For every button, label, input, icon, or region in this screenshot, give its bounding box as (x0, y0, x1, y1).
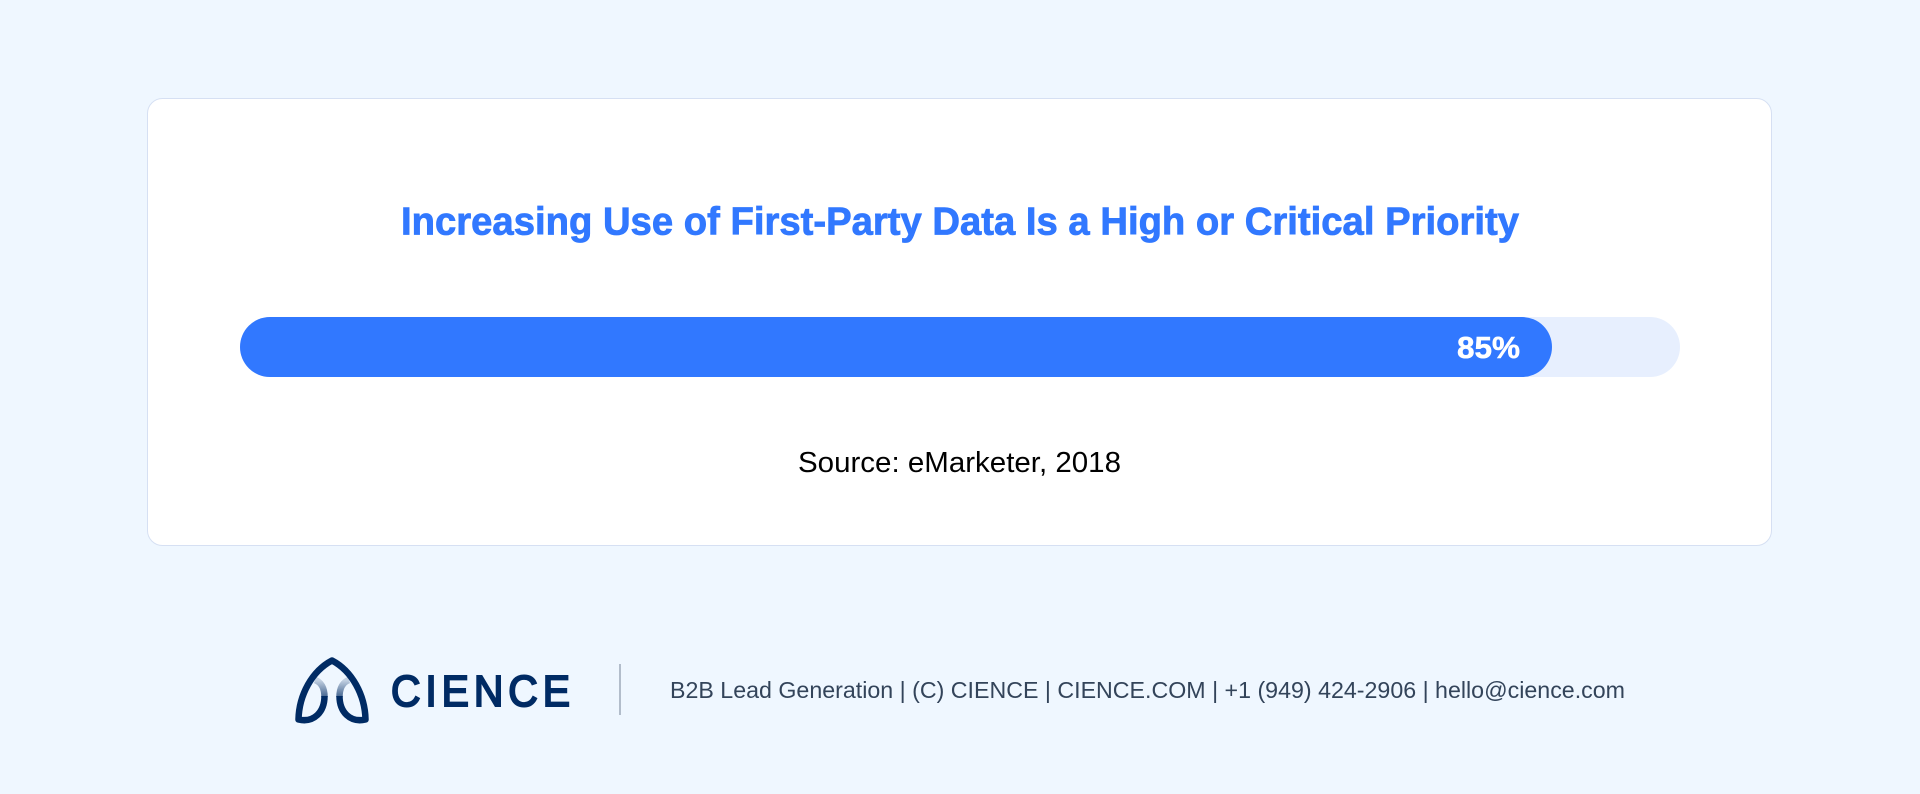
logo wordmark: CIENCE (391, 668, 570, 716)
source text: Source: eMarketer, 2018 (798, 447, 1121, 479)
panel: main card (148, 98, 1772, 546)
divider (619, 664, 621, 715)
progress bar fill: 85% (240, 317, 1552, 377)
title: Increasing Use of First-Party Data Is a High or Critical Priority (401, 200, 1519, 244)
footer contact text: B2B Lead Generation | (C) CIENCE | CIENCE.COM | +1 (949) 424-2906 | hello@cience.com (670, 677, 1625, 703)
icon: CIENCE logo mark (298, 660, 366, 720)
footer (298, 660, 1625, 720)
value label: 85% (1457, 330, 1520, 365)
progress bar chart (240, 317, 1680, 377)
